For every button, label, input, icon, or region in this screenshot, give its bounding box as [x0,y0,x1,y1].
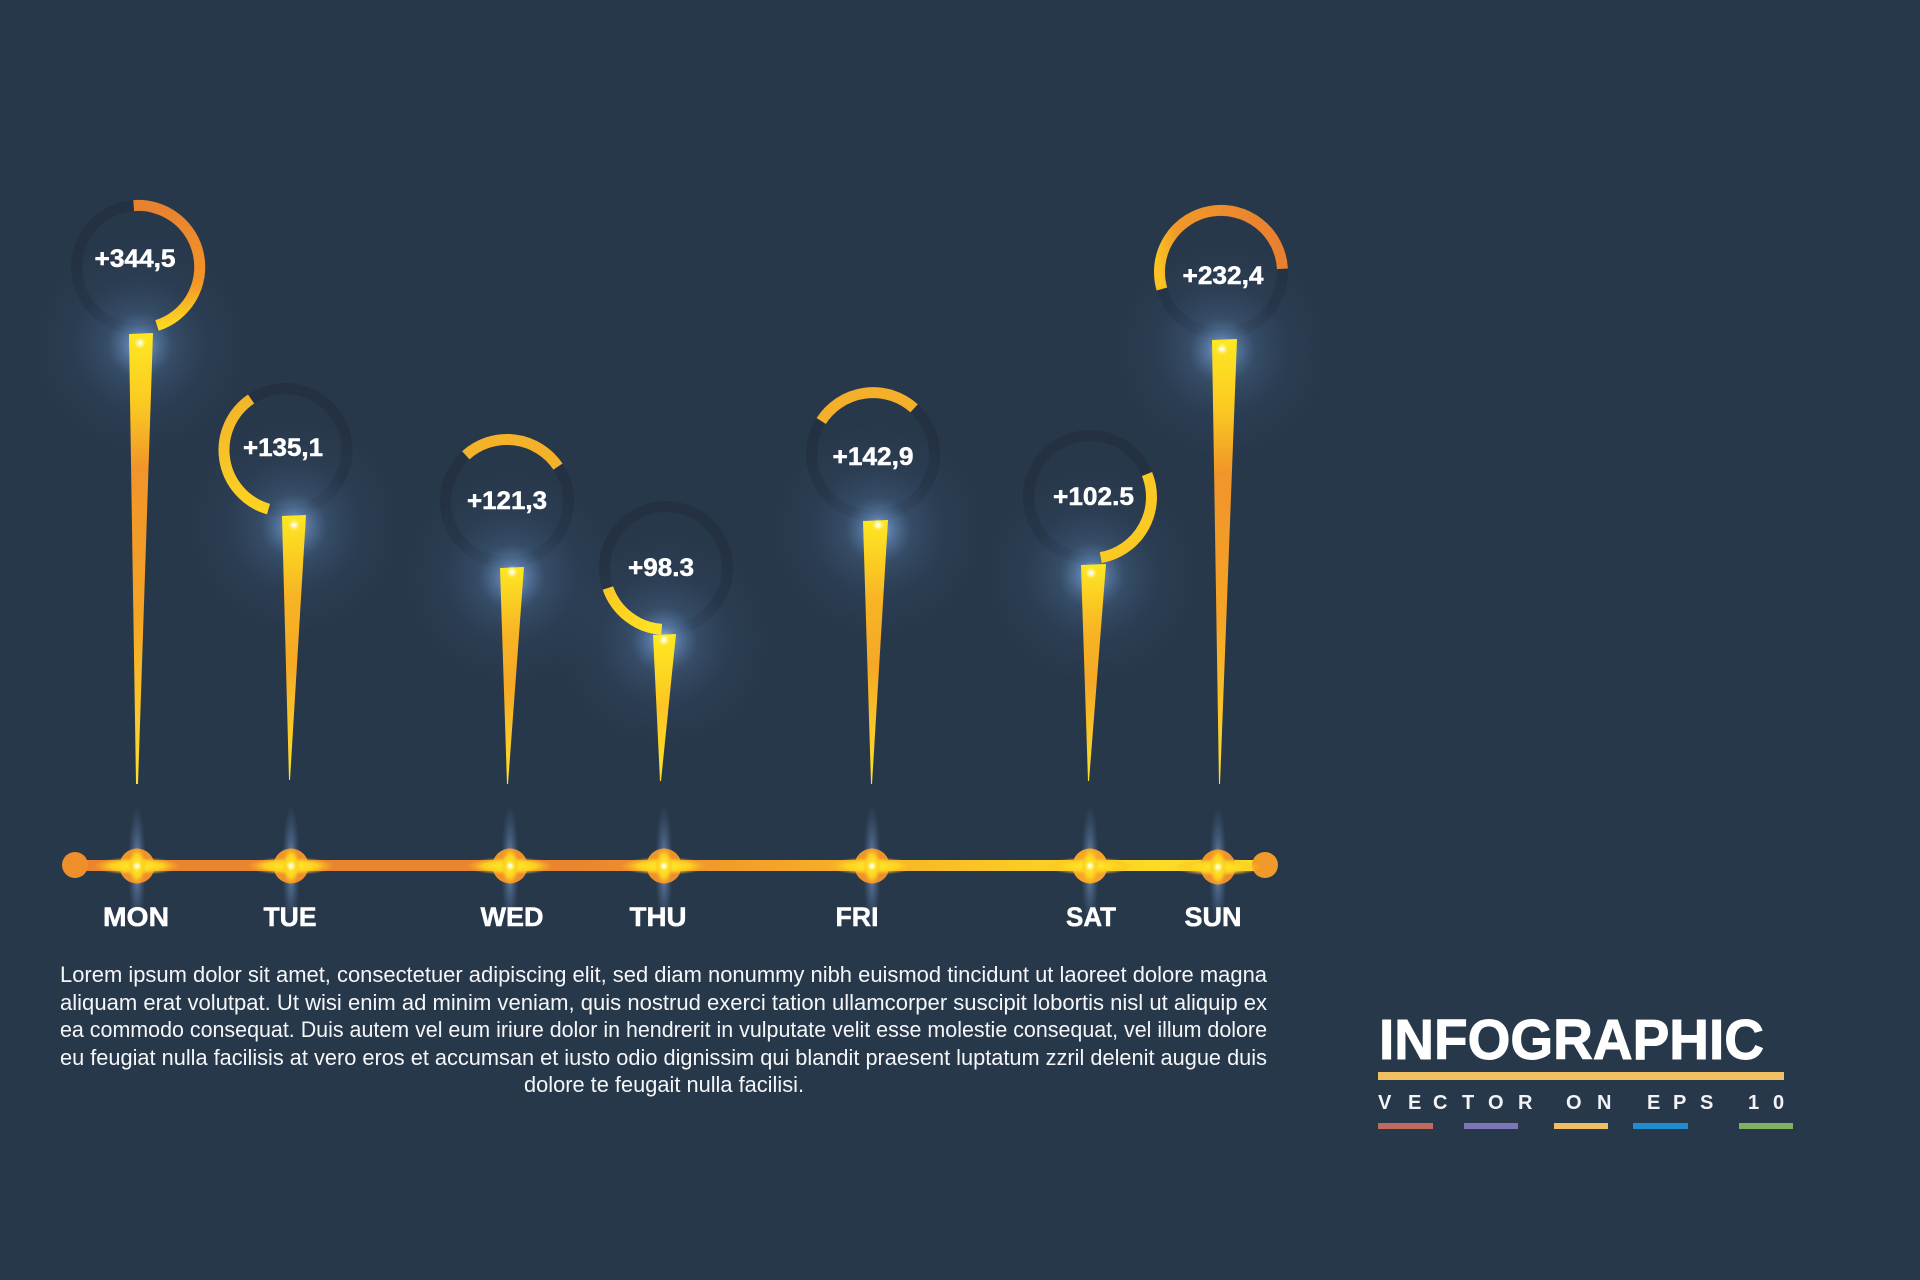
description paragraph [60,962,1268,1097]
pin: Friday: +142,9 [832,443,914,471]
timeline axis [62,852,1278,878]
description paragraph: eu feugiat nulla facilisis at vero eros et accumsan et iusto odio dignissim qui blandit praesent luptatum zzril delenit augue duis [60,1045,1267,1070]
timeline node: Wednesday [466,804,554,928]
description paragraph: ea commodo consequat. Duis autem vel eum iriure dolor in hendrerit in vulputate velit esse molestie consequat, vel illum dolore [60,1017,1267,1042]
day labels: SUN [1184,902,1242,932]
day labels: SAT [1066,902,1116,932]
description paragraph: dolore te feugait nulla facilisi. [524,1072,804,1097]
day labels: THU [630,902,686,932]
colour bars [1378,1123,1793,1129]
title text: INFOGRAPHIC [1379,1008,1764,1072]
timeline start cap [62,852,88,878]
pin: Saturday [982,436,1202,781]
description paragraph: Lorem ipsum dolor sit amet, consectetuer adipiscing elit, sed diam nonummy nibh euismod tincidunt ut laoreet dolore magna [60,962,1268,987]
pin: Wednesday: +121,3 [467,487,547,515]
timeline node: Saturday [1046,804,1134,928]
title block [1378,1008,1793,1129]
pin: Sunday: +232,4 [1182,262,1264,290]
pin: Tuesday: +135,1 [243,434,323,462]
title underline [1378,1072,1784,1080]
pin: Monday: +344,5 [94,245,176,273]
pin: Monday [30,205,250,784]
day labels: MON [103,902,169,932]
pin: Saturday: +102.5 [1053,483,1134,511]
subtitle: VECTOR ON EPS 10 [1378,1092,1784,1114]
timeline node: Tuesday [247,804,335,928]
day labels: TUE [264,902,316,932]
pin: Friday [768,392,988,784]
pin: Thursday: +98.3 [628,554,694,582]
day labels: FRI [836,902,878,932]
day labels: WED [480,902,544,932]
timeline node: Sunday [1174,805,1262,929]
description paragraph: aliquam erat volutpat. Ut wisi enim ad minim veniam, quis nostrud exerci tation ullamcorper suscipit lobortis nisl ut aliquip ex [60,990,1267,1015]
pin: Sunday [1112,210,1332,784]
timeline node: Thursday [620,804,708,928]
day labels [103,902,1242,932]
pin: Wednesday [402,439,622,784]
pin: Tuesday [184,388,404,780]
pin: Thursday [554,506,774,781]
timeline node: Friday [828,804,916,928]
timeline node: Monday [93,804,181,928]
